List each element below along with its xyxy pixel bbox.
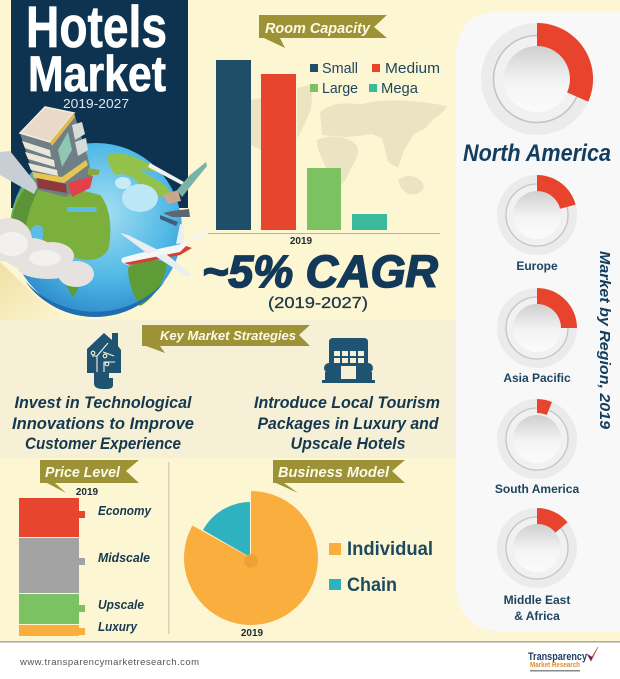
stacked bar: price level: 2019 [76,487,99,498]
labels: price level [98,504,152,634]
title: Market: Market [28,46,166,102]
label: Europe: Europe [516,259,558,273]
heading ribbon: Room Capacity: Room Capacity [265,21,371,37]
legend: room capacity: Large [322,80,358,97]
logo: Transparency Market Research [528,647,598,672]
icon: statue and landmark [148,162,207,226]
donut: Europe [497,175,577,255]
text block: strategy one: Invest in Technological [14,394,192,412]
text block: strategy one: Customer Experience [25,435,181,453]
donut: South America [497,399,577,479]
label: South America: South America [495,482,579,496]
labels: price level: Midscale [98,551,150,565]
footer website: www.transparencymarketresearch.com [19,657,199,668]
heading ribbon: Price Level: Price Level [45,464,121,481]
legend: room capacity: Medium [385,60,440,77]
globe [10,143,182,317]
stacked bar: price level [19,487,99,636]
heading ribbon: Business Model [273,460,405,493]
icon: cloud [0,218,94,287]
pie chart: business model: 2019 [241,628,264,639]
labels: price level: Upscale [98,598,144,612]
label: Middle East and Africa: & Africa [514,609,560,623]
bar chart: room capacity: 2019 [290,236,313,247]
legend: business model: Individual [347,539,433,560]
donut: North America [481,23,593,135]
donut: Asia Pacific [497,288,577,368]
legend: room capacity: Small [322,60,358,77]
text block: strategy one [12,394,194,453]
icon: hotel front [322,338,375,383]
labels: price level: Economy [98,504,152,518]
illustration: globe with hotel and plane [0,107,208,320]
text block: strategy two: Packages in Luxury and [258,415,439,433]
legend: room capacity: Mega [381,80,419,97]
icon: airplane [120,224,208,276]
panel: market by region [456,12,620,632]
icon: hotel building [0,107,100,197]
text block: strategy two: Introduce Local Tourism [254,394,440,412]
heading ribbon: Key Market Strategies [142,325,310,353]
title panel [11,0,188,208]
CAGR period: (2019-2027) [268,295,368,312]
logo: Transparency Market Research: Market Research [530,662,580,669]
strategies band background [0,320,456,458]
label: Middle East and Africa: Middle East [504,593,570,607]
legend: room capacity [310,60,440,97]
ground shadow [0,262,70,320]
CAGR headline: ~5% CAGR [202,246,438,297]
text block: strategy one: Innovations to Improve [12,415,194,433]
heading ribbon: Key Market Strategies: Key Market Strategies [160,328,296,343]
heading ribbon: Business Model: Business Model [278,464,390,481]
legend: business model [329,539,433,596]
label: Asia Pacific: Asia Pacific [503,371,571,385]
legend: business model: Chain [347,575,397,596]
labels: price level: Luxury [98,620,138,634]
world map backdrop [251,84,447,195]
donut: Middle East and Africa [497,508,577,588]
label: Middle East and Africa [504,593,570,623]
vertical heading: Market by Region: Market by Region, 2019 [596,251,613,430]
bar chart: room capacity [208,60,440,247]
heading ribbon: Price Level [40,460,139,493]
title years: 2019-2027 [63,96,129,111]
heading ribbon: Room Capacity [259,15,387,48]
text block: strategy two: Upscale Hotels [290,435,406,453]
logo: Transparency Market Research: Transparency [528,651,588,663]
text block: strategy two [254,394,440,453]
pie chart: business model [184,491,318,639]
footer [0,641,620,679]
icon: smart house [87,333,121,389]
